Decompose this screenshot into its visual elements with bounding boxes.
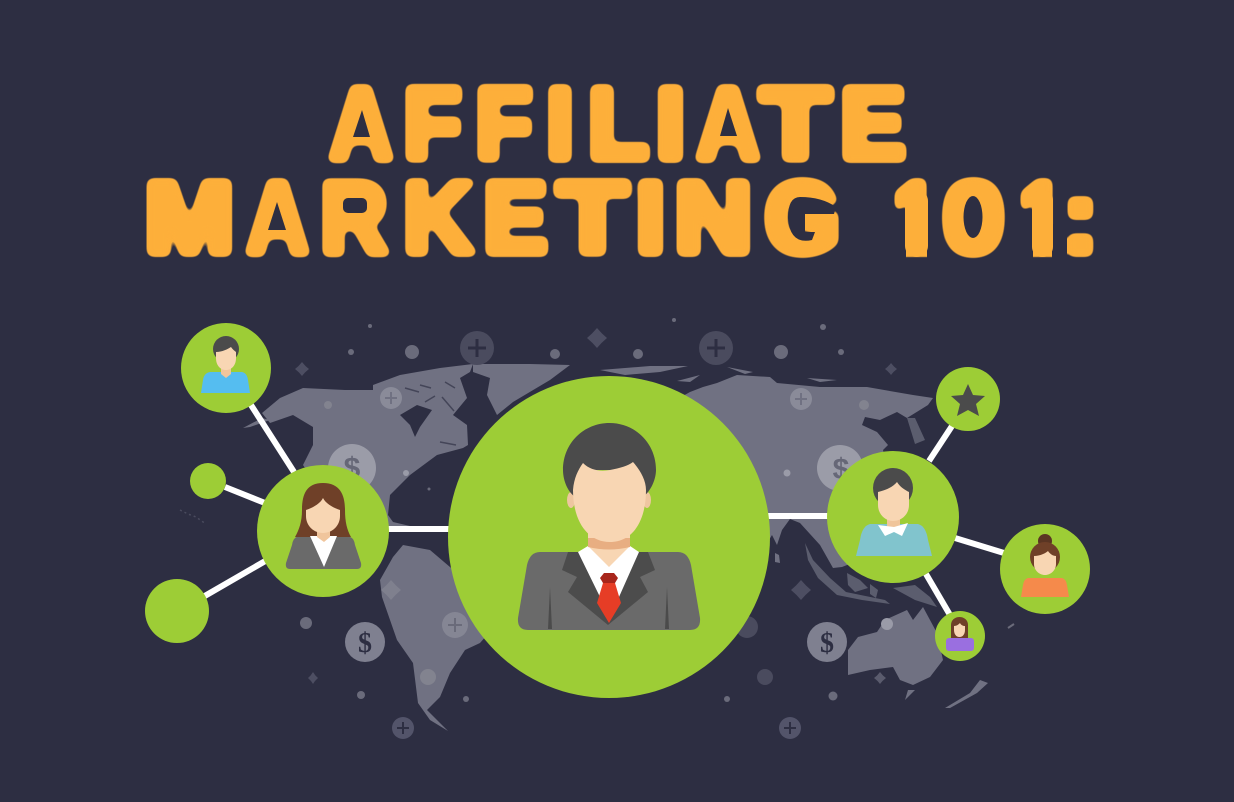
decorative coins and sparkles: $ (820, 628, 834, 659)
world map (180, 364, 1014, 731)
title: I (636, 162, 665, 274)
title: M (145, 162, 234, 274)
title: 1 (1019, 162, 1064, 274)
title: I (546, 68, 574, 180)
decorative coins and sparkles: $ (358, 628, 372, 659)
title: R (321, 162, 387, 274)
node: woman in grey suit (257, 465, 389, 597)
title: K (404, 162, 472, 274)
title: 1 (893, 162, 938, 274)
title: E (484, 162, 547, 274)
node: star (936, 367, 1000, 431)
node: woman with bun (1000, 524, 1090, 614)
title: A (247, 162, 308, 274)
title: N (675, 162, 752, 274)
decorative coins and sparkles: $ (344, 452, 361, 485)
decorative coins and sparkles (295, 318, 897, 739)
title letter counters and digit shaping (268, 108, 1067, 262)
title: E (840, 68, 905, 180)
title: F (476, 68, 532, 180)
node: woman in purple (935, 611, 985, 661)
title: T (761, 68, 830, 180)
node: man in blue shirt (181, 323, 271, 413)
connector lines (203, 405, 1004, 615)
title: A (330, 68, 392, 180)
title: 0 (943, 162, 1004, 274)
title: A (697, 68, 759, 180)
node: central businessman (448, 376, 770, 698)
small empty nodes (145, 463, 226, 643)
title: F (404, 68, 461, 180)
decorative coins and sparkles: $ (833, 453, 850, 486)
title (145, 68, 1098, 274)
title: G (765, 162, 840, 274)
node: man in teal sweater (827, 451, 959, 583)
title: : (1063, 162, 1098, 274)
title: I (656, 68, 685, 180)
title: L (588, 68, 648, 180)
title: T (558, 162, 627, 274)
